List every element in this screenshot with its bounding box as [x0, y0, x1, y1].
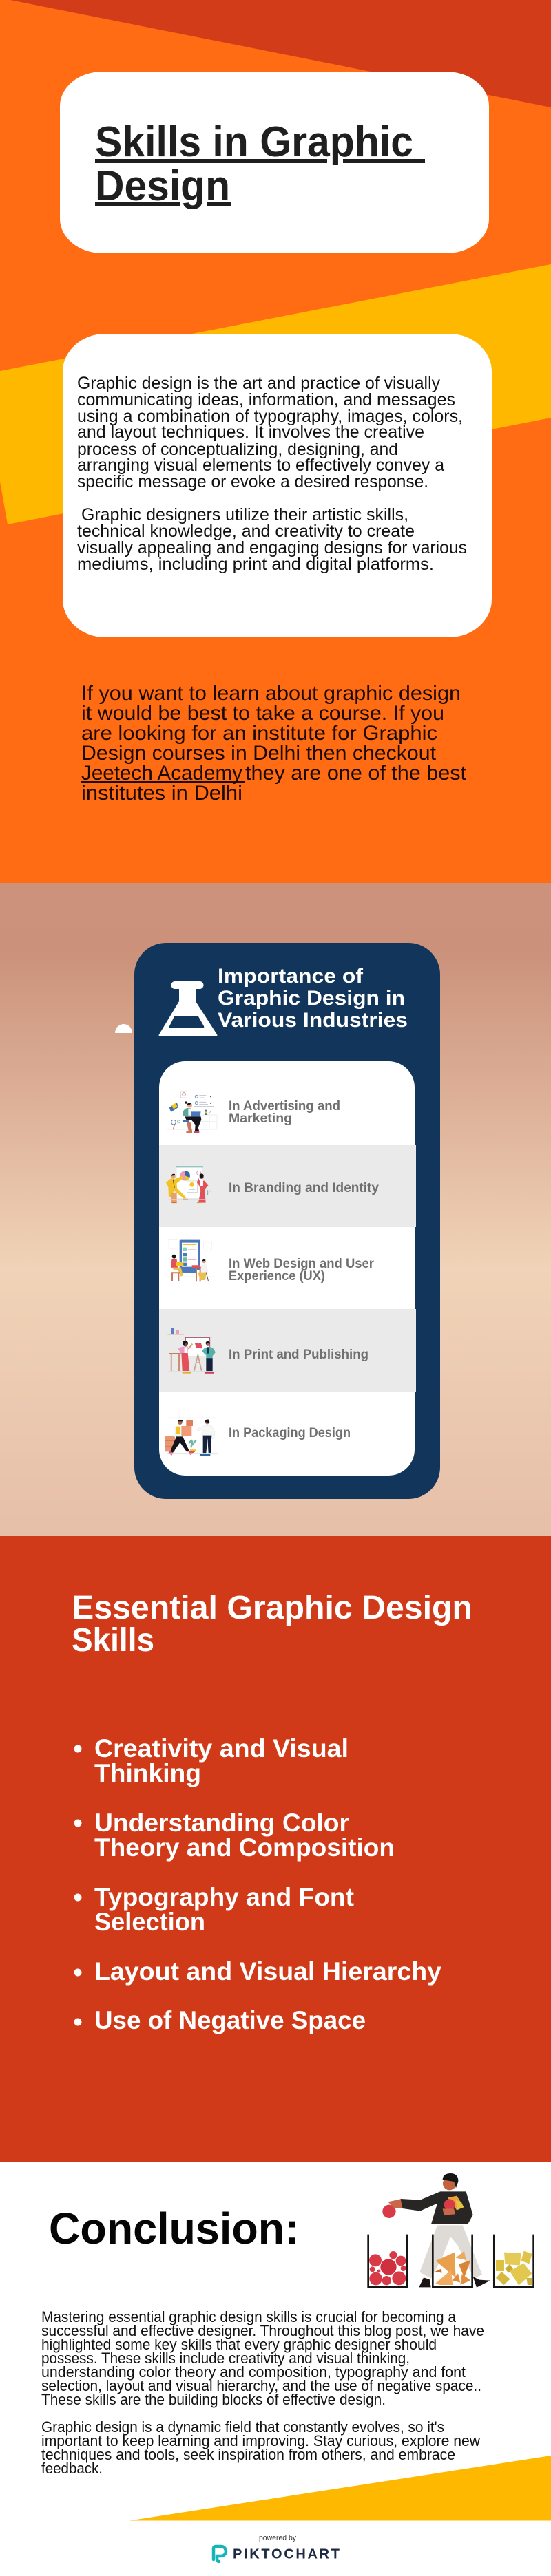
text block: definition of graphic design: process of conceptualizing, designing, and — [77, 440, 398, 459]
skill 1: Thinking — [94, 1759, 201, 1787]
skill 4: Layout and Visual Hierarchy — [94, 1957, 441, 1986]
icon: two people reviewing print — [167, 1328, 217, 1373]
text block: conclusion paragraph two: important to keep learning and improving. Stay curious, explore new — [41, 2432, 480, 2449]
footer: powered by piktochart — [214, 2534, 340, 2562]
title: Skills in Graphic — [95, 118, 413, 166]
balls — [369, 2251, 406, 2285]
heading: Importance of — [218, 965, 364, 988]
heading: conclusion: Conclusion: — [49, 2204, 299, 2253]
label — [229, 1098, 340, 1126]
text block: conclusion paragraph two — [41, 2418, 480, 2477]
text block: what designers do — [77, 505, 467, 574]
panel: essential skills section — [0, 1536, 551, 2162]
decorative yellow wedge — [129, 2456, 551, 2520]
list row: branding and identity — [166, 1166, 379, 1203]
title: Design — [95, 162, 230, 210]
title — [95, 118, 425, 210]
text block: course recommendation: If you want to learn about graphic design — [81, 682, 461, 705]
label: In Packaging Design — [229, 1425, 351, 1440]
list row: packaging design — [165, 1409, 351, 1456]
text block: conclusion paragraph one: These skills are the building blocks of effective design. — [41, 2391, 386, 2408]
skill 1 — [74, 1734, 349, 1787]
skill 1: Creativity and Visual — [94, 1734, 349, 1763]
text block: conclusion paragraph two: techniques and tools, seek inspiration from others, and embrace — [41, 2446, 455, 2463]
pyramids — [435, 2251, 470, 2285]
text block: conclusion paragraph one: Mastering essential graphic design skills is crucial for becoming a — [41, 2308, 457, 2325]
text block: definition of graphic design: arranging visual elements to effectively convey a — [77, 456, 444, 475]
panel: orange intro section — [0, 0, 551, 883]
label — [229, 1256, 374, 1284]
chest shapes — [448, 2196, 464, 2211]
footer: powered by piktochart: powered by — [259, 2534, 296, 2542]
list row: advertising and marketing — [167, 1092, 340, 1133]
skill 2: Theory and Composition — [94, 1833, 395, 1862]
trousers — [419, 2225, 482, 2279]
panel: conclusion section — [0, 2162, 551, 2576]
text block: course recommendation: institutes in Delhi — [81, 782, 242, 805]
text block: conclusion paragraph one: possess. These skills include creativity and visual thinking, — [41, 2350, 410, 2367]
heading — [218, 965, 408, 1032]
icon: woman with laptop — [167, 1092, 217, 1133]
text block: course recommendation — [81, 682, 467, 805]
cubes — [496, 2251, 532, 2286]
text block: course recommendation: it would be best to take a course. If you — [81, 702, 444, 725]
label: In Branding and Identity — [229, 1180, 379, 1195]
skill 2 — [74, 1809, 395, 1862]
heading — [72, 1590, 472, 1659]
skill 3 — [74, 1883, 354, 1936]
label: In Advertising and — [229, 1098, 340, 1114]
list row: print and publishing — [167, 1328, 368, 1373]
heading: Skills — [72, 1622, 154, 1659]
skill 3: Selection — [94, 1908, 205, 1936]
heading: Various Industries — [218, 1009, 408, 1032]
icon: presentation with two people — [166, 1166, 211, 1203]
label: In Web Design and User — [229, 1256, 374, 1271]
panel: navy card — [134, 943, 440, 1499]
text block: definition of graphic design: communicating ideas, information, and messages — [77, 390, 455, 409]
text block: definition of graphic design: using a combination of typography, images, colors, — [77, 407, 463, 426]
text block: course recommendation: are looking for an institute for Graphic — [81, 722, 437, 745]
text block: definition of graphic design — [77, 374, 463, 491]
intro text card — [63, 334, 492, 637]
heading: Essential Graphic Design — [72, 1590, 472, 1626]
label: Marketing — [229, 1111, 292, 1126]
text block: conclusion paragraph two: feedback. — [41, 2460, 103, 2477]
icon: flask — [159, 981, 217, 1036]
text block: definition of graphic design: specific message or evoke a desired response. — [77, 472, 428, 491]
text block: course recommendation: they are one of the best — [245, 762, 467, 785]
text block: course recommendation: Design courses in Delhi then checkout — [81, 742, 437, 765]
text block: conclusion paragraph one: successful and effective designer. Throughout this blog post, we have — [41, 2322, 484, 2339]
icon: giant phone with team — [165, 1240, 215, 1281]
head — [443, 2177, 456, 2190]
label: In Print and Publishing — [229, 1347, 368, 1362]
icon: people carrying boxes — [165, 1409, 218, 1456]
skill 5: Use of Negative Space — [94, 2006, 366, 2034]
jars — [368, 2235, 534, 2287]
skills list — [74, 1734, 441, 2034]
skill 3: Typography and Font — [94, 1883, 354, 1911]
text block: what designers do: visually appealing and engaging designs for various — [77, 538, 467, 557]
list row: web design and user experience — [165, 1240, 374, 1284]
panel: industries list — [159, 1061, 416, 1476]
label: Experience (UX) — [229, 1268, 325, 1284]
illustration: person sorting shapes into jars — [368, 2173, 534, 2288]
panel: importance of graphic design section — [0, 883, 551, 1536]
skill 2: Understanding Color — [94, 1809, 349, 1837]
icon: small white dome — [115, 1024, 132, 1033]
text block: conclusion paragraph two: Graphic design is a dynamic field that constantly evolves, so it's — [41, 2418, 444, 2436]
text block: course recommendation: Jeetech Academy — [81, 762, 242, 785]
text block: what designers do: mediums, including print and digital platforms. — [77, 555, 434, 574]
hand and held ball — [382, 2205, 396, 2218]
text block: conclusion paragraph one — [41, 2308, 484, 2408]
shoes — [419, 2277, 431, 2287]
text block: definition of graphic design: Graphic design is the art and practice of visually — [77, 374, 440, 393]
text block: what designers do: Graphic designers utilize their artistic skills, — [81, 505, 408, 524]
text block: definition of graphic design: and layout techniques. It involves the creative — [77, 423, 424, 442]
text block: what designers do: technical knowledge, and creativity to create — [77, 522, 415, 541]
text block: conclusion paragraph one: selection, layout and visual hierarchy, and the use of negative space.. — [41, 2377, 481, 2394]
text block: conclusion paragraph one: highlighted some key skills that every graphic designer should — [41, 2336, 437, 2353]
title card — [60, 72, 489, 253]
text block: conclusion paragraph one: understanding color theory and composition, typography and font — [41, 2363, 466, 2381]
heading: Graphic Design in — [218, 987, 405, 1010]
footer: powered by piktochart: PIKTOCHART — [233, 2546, 340, 2562]
icon: piktochart logo — [214, 2546, 226, 2562]
torso and arm — [399, 2191, 473, 2224]
